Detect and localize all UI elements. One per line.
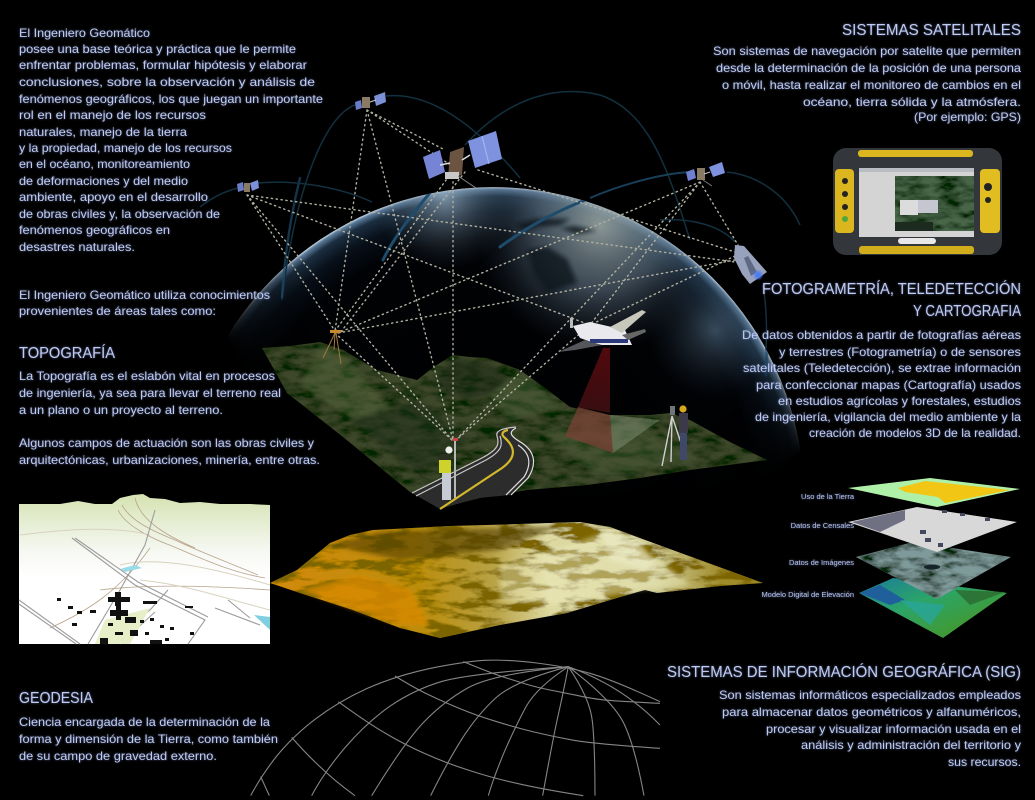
GIS layer labels: Datos de Censales (791, 521, 854, 530)
sunlit regions (381, 187, 770, 386)
text block: geodesia (19, 715, 278, 763)
ridge shading (300, 345, 700, 478)
GIS layer labels: Modelo Digital de Elevación (761, 590, 854, 599)
text block: intro ingeniero geomático: conclusiones, sobre la observación y análisis de (19, 75, 315, 89)
layer: elevation model (859, 578, 1007, 638)
orbit lines (200, 92, 800, 350)
text block: SIG (719, 688, 1021, 769)
text block: topografía: de ingeniería, ya sea para llevar el terreno real (19, 386, 281, 400)
text block: intro ingeniero geomático: fenómenos geográficos en (19, 223, 170, 237)
GIS layers stack (848, 478, 1020, 638)
text block: SIG: análisis y administración del territorio y (801, 738, 1021, 752)
satellite signal lines (247, 110, 738, 440)
heading: sistemas satelitales: SISTEMAS SATELITALES (842, 22, 1021, 39)
rugged tablet (833, 148, 1002, 255)
text block: topografía: a un plano o un proyecto al terreno. (19, 403, 223, 417)
text block: áreas: El Ingeniero Geomático utiliza conocimientos (19, 288, 270, 302)
gold elevation terrain (270, 522, 763, 638)
text block: topografía: La Topografía es el eslabón vital en procesos (19, 369, 275, 383)
text block: intro ingeniero geomático: fenómenos geográficos, los que juegan un importante (19, 92, 323, 106)
GIS layer labels (761, 492, 855, 599)
text block: intro ingeniero geomático: ambiente, apoyo en el desarrollo (19, 190, 208, 204)
text block: fotogrametría: de ingeniería, vigilancia del medio ambiente y la (755, 410, 1021, 424)
text block: fotogrametría: para confeccionar mapas (Cartografía) usados (756, 378, 1021, 392)
text block: geodesia: Ciencia encargada de la determinación de la (19, 715, 270, 729)
text block: intro ingeniero geomático: rol en el manejo de los recursos (19, 108, 206, 122)
text block: intro ingeniero geomático (19, 26, 323, 254)
GIS layer labels: Datos de Imágenes (789, 558, 854, 567)
heading: topografía: TOPOGRAFÍA (19, 343, 115, 362)
text block: SIG: sus recursos. (948, 755, 1021, 769)
text block: sistemas satelitales: o móvil, hasta realizar el monitoreo de cambios en el (722, 78, 1021, 92)
surveyor with GPS rod (439, 438, 458, 500)
road (412, 427, 534, 509)
text block: fotogrametría: De datos obtenidos a partir de fotografías aéreas (742, 328, 1021, 342)
text block: intro ingeniero geomático: enfrentar problemas, formular hipótesis y elaborar (19, 58, 307, 72)
heading: geodesia: GEODESIA (19, 690, 93, 707)
text block: intro ingeniero geomático: El Ingeniero Geomático (19, 26, 150, 40)
wireframe globe (251, 660, 660, 796)
text block: topografía: arquitectónicas, urbanizaciones, minería, entre otras. (19, 453, 320, 467)
text block: sistemas satelitales: Son sistemas de navegación por satelite que permiten (713, 44, 1021, 58)
layer: imagery (856, 542, 1011, 599)
heading: SIG: SISTEMAS DE INFORMACIÓN GEOGRÁFICA (SIG) (667, 662, 1021, 681)
text block: fotogrametría: satelitales (Teledetección), se extrae información (743, 361, 1021, 375)
text block: fotogrametría: y terrestres (Fotogrametría) o de sensores (779, 345, 1021, 359)
text block: intro ingeniero geomático: desastres naturales. (19, 240, 135, 254)
satellite large (423, 131, 502, 188)
text block: topografía (19, 369, 320, 467)
tripod antenna (323, 330, 341, 364)
topographic map (19, 494, 270, 644)
heading: fotogrametría (762, 279, 1021, 320)
text block: intro ingeniero geomático: y la propiedad, manejo de los recursos (19, 141, 232, 155)
orbit passing over earth (500, 198, 590, 247)
text block: topografía: Algunos campos de actuación son las obras civiles y (19, 436, 314, 450)
text block: intro ingeniero geomático: de deformaciones y del medio (19, 174, 188, 188)
layer: census data (848, 507, 1017, 552)
text block: SIG: Son sistemas informáticos especializados empleados (719, 688, 1021, 702)
text block: sistemas satelitales (713, 44, 1021, 124)
text block: intro ingeniero geomático: naturales, manejo de la tierra (19, 125, 187, 139)
text block: fotogrametría (742, 328, 1021, 440)
satellite right (686, 162, 725, 186)
GIS layer labels: Uso de la Tierra (801, 492, 855, 501)
text block: sistemas satelitales: océano, tierra sólida y la atmósfera. (803, 95, 1021, 109)
layer: land use (848, 478, 1020, 507)
text block: áreas: provenientes de áreas tales como: (19, 304, 216, 318)
text block: fotogrametría: creación de modelos 3D de la realidad. (809, 426, 1021, 440)
satellite left (237, 180, 259, 192)
earth globe (230, 187, 800, 449)
text block: intro ingeniero geomático: posee una base teórica y práctica que le permite (19, 42, 296, 56)
topographer with total station (662, 405, 688, 466)
text block: geodesia: forma y dimensión de la Tierra, como también (19, 732, 278, 746)
text block: intro ingeniero geomático: de obras civiles y, la observación de (19, 207, 220, 221)
plane (558, 310, 646, 352)
text block: SIG: para almacenar datos geométricos y alfanuméricos, (722, 705, 1021, 719)
text block: fotogrametría: en estudios agrícolas y forestales, estudios (778, 394, 1021, 408)
text block: sistemas satelitales: (Por ejemplo: GPS) (914, 110, 1021, 124)
terrain with road (262, 342, 767, 509)
text block: áreas (19, 288, 270, 318)
text block: sistemas satelitales: desde la determinación de la posición de una persona (716, 61, 1021, 75)
text block: geodesia: de su campo de gravedad externo. (19, 749, 217, 763)
satellite small top (355, 92, 386, 110)
text block: intro ingeniero geomático: en el océano, monitoreamiento (19, 157, 190, 171)
text block: SIG: procesar y visualizar información usada en el (766, 722, 1021, 736)
red laser scan from plane (565, 348, 660, 453)
rocket (734, 245, 767, 284)
continents (500, 219, 597, 293)
